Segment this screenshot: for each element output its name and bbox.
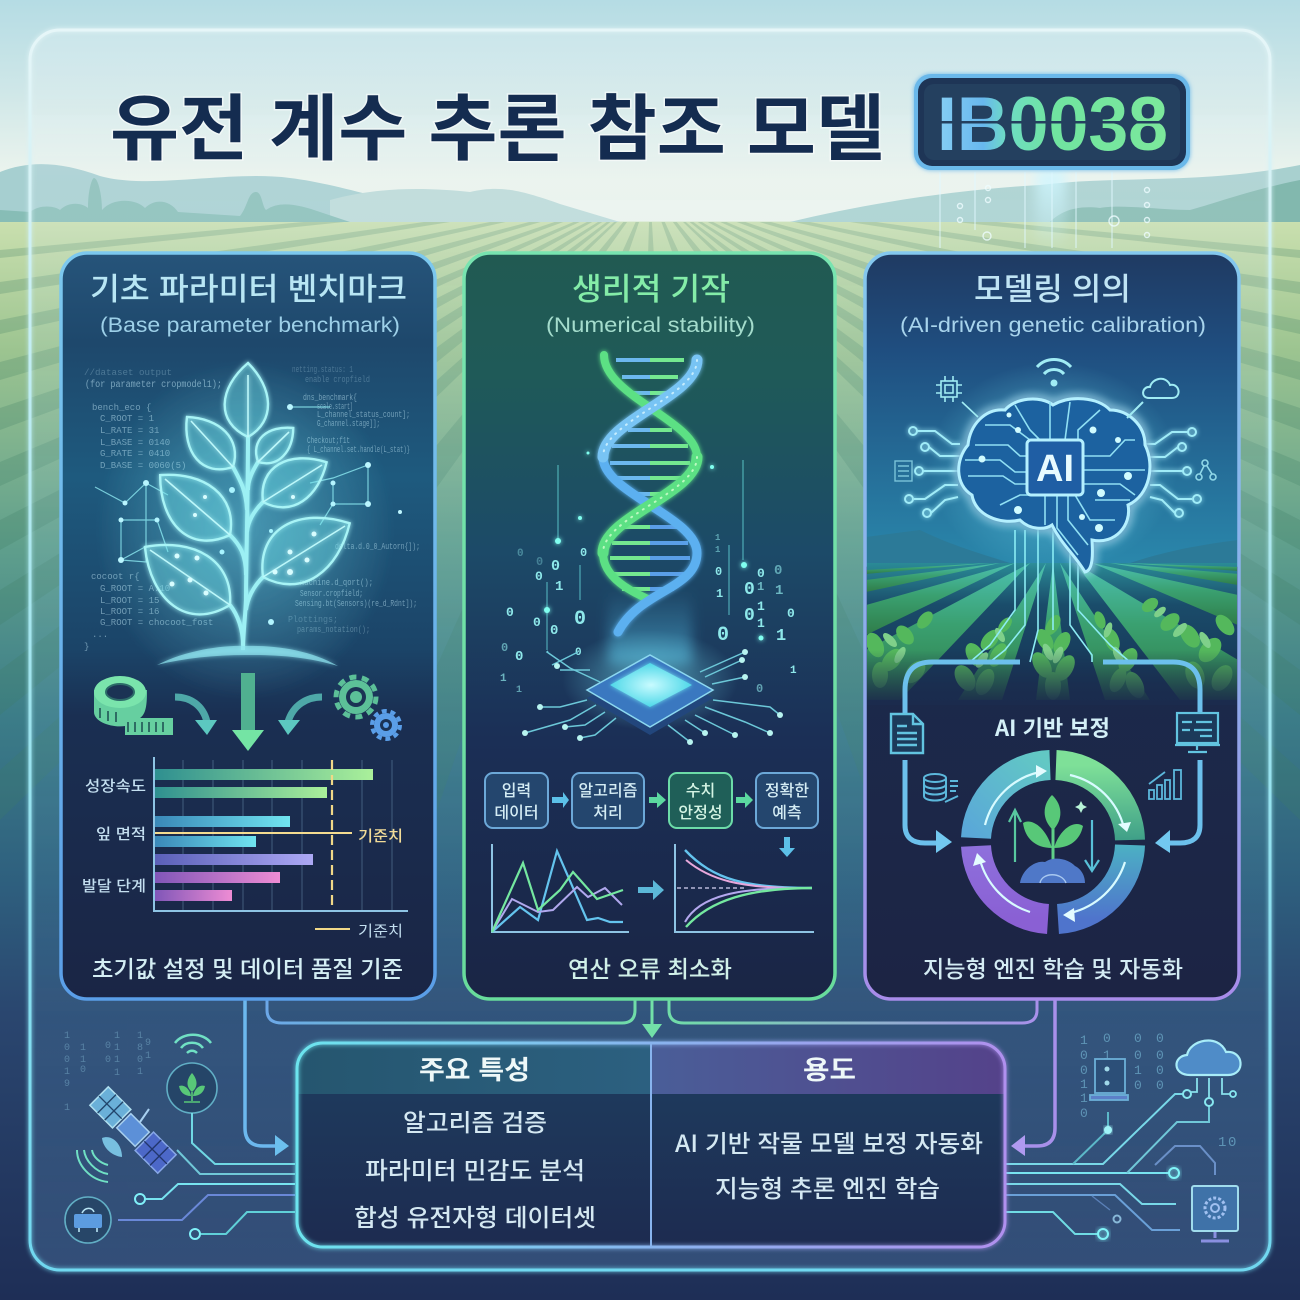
binary digits: bottom left: 0 (105, 1055, 111, 1066)
binary digits: 1 (757, 599, 765, 614)
flow: input to prediction: 예측 (772, 799, 802, 823)
bar chart: 기준치 (358, 825, 403, 846)
binary digits: 1 (715, 545, 721, 555)
code snippets behind plant: Sensor.cropfield; (300, 589, 363, 599)
column heading: uses: 용도 (803, 1050, 856, 1087)
binary digits: 0 (575, 647, 582, 659)
list: key characteristics: 알고리즘 검증 (403, 1103, 547, 1138)
caption: benchmark: 초기값 설정 및 데이터 품질 기준 (92, 950, 403, 984)
column heading: key characteristics: 주요 특성 (419, 1050, 530, 1087)
flow: input to prediction: 처리 (593, 799, 623, 823)
binary digits: 1 (715, 533, 721, 543)
code snippets behind plant: L_channel_status_count]; (317, 410, 410, 420)
illustration: DNA helix (500, 355, 797, 745)
icon: gear monitor (1192, 1186, 1238, 1241)
icon: gears (336, 677, 400, 739)
binary digits: bottom right: 1 (1080, 1033, 1088, 1048)
binary digits: 0 (574, 608, 586, 631)
binary digits: bottom right: 0 (1156, 1048, 1164, 1063)
binary digits: bottom left: 1 (114, 1043, 120, 1054)
code snippets behind plant: //dataset output (84, 368, 172, 378)
binary digits: bottom right: 0 (1103, 1031, 1111, 1046)
loop: lower left arrow (905, 760, 952, 853)
bar chart: 발달 단계 (82, 875, 146, 896)
binary digits: bottom right: 0 (1134, 1048, 1142, 1063)
icon: sprout (1009, 795, 1099, 883)
code snippets behind plant: G_RATE = 0410 (100, 449, 170, 459)
flow: input to prediction: 수치 (686, 777, 715, 801)
arrow: centre panel to table (642, 1000, 662, 1038)
flow: input to prediction: 입력 (502, 777, 531, 801)
panel: base parameter benchmark (61, 253, 435, 999)
binary digits: 1 (790, 665, 797, 677)
illustration: AI brain (905, 362, 1201, 572)
flow: input to prediction: 데이터 (494, 799, 539, 823)
binary digits: bottom right: 0 (1156, 1031, 1164, 1046)
binary digits: 0 (536, 555, 543, 569)
binary digits: bottom left: 0 (105, 1041, 111, 1052)
circuit lines: bottom left (118, 1113, 295, 1239)
code snippets behind plant: { L_channel.set.handle(L_stat)} (307, 445, 410, 455)
label: AI calibration: AI 기반 보정 (994, 711, 1110, 743)
binary digits: 1 (757, 616, 765, 631)
code snippets behind plant: ... (92, 630, 108, 640)
binary digits: bottom left: 0 (64, 1043, 70, 1054)
heading: benchmark: 기초 파라미터 벤치마크 (90, 264, 407, 309)
chart: unstable lines (492, 844, 629, 932)
binary digits: bottom left: 8 (137, 1043, 143, 1054)
arrow: centre down to chart (232, 673, 264, 751)
icon: wifi above plant bubble (175, 1035, 211, 1053)
binary digits: bottom right: 1 (1103, 1048, 1111, 1063)
binary digits: 0 (515, 649, 523, 665)
binary digits: 0 (551, 558, 560, 575)
binary digits: bottom left (64, 1031, 151, 1114)
binary digits: bottom left: 0 (137, 1055, 143, 1066)
binary digits: bottom right: 1 (1080, 1077, 1088, 1092)
code snippets behind plant: bench_eco { (92, 403, 151, 413)
binary digits: 1 (775, 583, 783, 599)
binary digits: 0 (757, 566, 765, 581)
flow: input to prediction: 정확한 (765, 777, 809, 801)
icon: laptop (1090, 1059, 1128, 1100)
bar chart: 성장속도 (85, 775, 146, 796)
code snippets behind plant: (for parameter cropmodel1); (85, 379, 222, 391)
illustration: AI field (862, 530, 1238, 705)
binary digits: 1 (555, 579, 563, 595)
code snippets behind plant: L_ROOT = 15 (100, 596, 159, 606)
code snippets behind plant: delta.d.0_0_Autorn{]); (335, 542, 420, 552)
binary digits: bottom left: 0 (64, 1055, 70, 1066)
binary digits: bottom left: 9 (64, 1079, 70, 1090)
binary digits: bottom left: 1 (114, 1068, 120, 1079)
binary digits: bottom left: 1 (80, 1043, 86, 1054)
binary digits: bottom left: 1 (145, 1051, 151, 1062)
binary digits: 0 (501, 641, 508, 655)
binary digits: 0 (517, 548, 524, 560)
cycle diagram (973, 765, 1131, 922)
flow: input to prediction (485, 773, 818, 857)
list: key characteristics: 합성 유전자형 데이터셋 (354, 1198, 596, 1233)
subheading: stability: (Numerical stability) (546, 314, 755, 337)
caption: significance: 지능형 엔진 학습 및 자동화 (923, 950, 1183, 984)
code snippets behind plant: machine.d_qort(); (300, 578, 373, 588)
circuit nodes around brain (905, 427, 1201, 517)
code snippets behind plant: Checkout;f1t (307, 436, 350, 446)
code snippets behind plant: netting.status: 1 (292, 365, 353, 375)
arrow: tape to chart (175, 697, 217, 735)
icon: small chip (936, 376, 978, 417)
binary digits: 0 (580, 546, 587, 560)
icon: plant bubble (167, 1063, 217, 1113)
bar chart: 잎 면적 (96, 823, 146, 844)
icon: satellite (77, 1087, 176, 1182)
flow: input to prediction: 알고리즘 (579, 777, 637, 801)
binary digits: bottom right: 0 (1156, 1063, 1164, 1078)
code snippets behind plant: } (84, 642, 89, 652)
binary digits: 1 (776, 627, 786, 646)
binary digits: bottom right: 0 (1080, 1048, 1088, 1063)
circuit lines: bottom right (1005, 1090, 1215, 1239)
code snippets behind plant: Plottings; (288, 615, 338, 625)
code snippets behind plant: dns_benchmark{ (303, 393, 357, 403)
binary digits: bottom right: 1 (1080, 1091, 1088, 1106)
connector trays under panels (267, 1000, 1037, 1023)
binary digits: 0 (756, 682, 763, 696)
code snippets behind plant: Sensing.bt(Sensors)(re_d_Rdnt]); (295, 599, 417, 609)
binary digits (500, 533, 797, 696)
code snippets behind plant: cocoot r{ (91, 572, 140, 582)
icon: document (895, 461, 912, 481)
caption: stability: 연산 오류 최소화 (568, 950, 732, 984)
binary digits: bottom left: 1 (64, 1067, 70, 1078)
icon: code monitor (1175, 713, 1220, 752)
binary digits: 0 (787, 606, 795, 621)
binary digits: 0 (774, 563, 782, 579)
binary digits: 0 (717, 624, 729, 647)
code snippets behind plant: enable cropfield (305, 375, 370, 385)
binary digits: 0 (715, 565, 722, 579)
icon: cloud (1127, 379, 1179, 418)
chip label: AI: AI (1036, 448, 1074, 490)
binary digits: 1 (757, 580, 764, 594)
icon: document file (891, 714, 923, 753)
graph nodes behind plant (95, 404, 402, 625)
binary digits: 1 (716, 587, 723, 601)
code snippets behind plant: G_ROOT = A.10 (100, 584, 170, 594)
heading: significance: 모델링 의의 (974, 264, 1131, 309)
binary digits: bottom left: 1 (64, 1031, 70, 1042)
code snippets behind plant: D_BASE = 0060(5) (100, 461, 186, 471)
icon: molecules (1196, 460, 1216, 480)
list: key characteristics: 파라미터 민감도 분석 (365, 1151, 585, 1186)
chart: converging lines (675, 844, 814, 932)
code snippets behind plant (84, 365, 420, 652)
binary digits: bottom right: 0 (1134, 1031, 1142, 1046)
code snippets behind plant: L_ROOT = 16 (100, 607, 159, 617)
code snippets behind plant: params_notation(); (297, 625, 370, 635)
flow: input to prediction: 안정성 (678, 799, 723, 823)
binary digits: 0 (744, 606, 755, 626)
table: characteristics and uses (297, 1043, 1005, 1247)
list: uses (675, 1124, 983, 1204)
binary digits: bottom right: 0 (1228, 1135, 1236, 1151)
subheading: significance: (AI-driven genetic calibration) (900, 314, 1206, 337)
binary digits: bottom left: 1 (64, 1103, 70, 1114)
binary digits: bottom left: 9 (145, 1038, 151, 1049)
arrow: gears to chart (278, 697, 322, 735)
binary digits: bottom right: 0 (1080, 1063, 1088, 1078)
arrow: between charts (638, 880, 664, 900)
icon: cloud with links (1176, 1040, 1241, 1098)
binary digits: bottom left: 1 (114, 1031, 120, 1042)
binary digits: bottom right: 0 (1156, 1078, 1164, 1093)
icon: sensor bubble (65, 1197, 111, 1243)
binary digits: bottom left: 1 (137, 1031, 143, 1042)
binary digits: bottom left: 0 (80, 1065, 86, 1076)
icon: growth bars (1149, 770, 1181, 799)
code snippets behind plant: scale.start] (317, 402, 353, 412)
list: uses: 지능형 추론 엔진 학습 (715, 1169, 940, 1204)
binary digits: 0 (535, 569, 543, 584)
code snippets behind plant: G_ROOT = chocoot_fost (100, 618, 213, 628)
panel: modelling significance (862, 253, 1239, 999)
code snippets behind plant: G_channel.stage]]; (317, 419, 380, 429)
code snippets behind plant: L_BASE = 0140 (100, 438, 170, 448)
binary digits: bottom right: 1 (1218, 1135, 1226, 1151)
bar chart: 기준치 (358, 920, 403, 941)
icon: database (924, 774, 958, 802)
binary digits: 1 (516, 685, 522, 696)
binary digits: 0 (744, 580, 755, 600)
arrow: right panel to table (1011, 1000, 1055, 1156)
title: 유전 계수 추론 참조 모델 (110, 70, 885, 175)
data stream under badge (940, 170, 1150, 252)
bar chart (82, 757, 408, 941)
code snippets behind plant: L_RATE = 31 (100, 426, 159, 436)
binary digits: bottom left: 1 (114, 1055, 120, 1066)
arrow: left panel to table (245, 1000, 289, 1156)
illustration: digital plant (95, 360, 395, 700)
list: key characteristics (354, 1103, 596, 1233)
illustration: chip with traces (522, 630, 783, 745)
binary digits: 0 (506, 605, 514, 620)
digital stream lines and dots (547, 460, 743, 650)
badge: IB0038: IB0038 (937, 82, 1168, 167)
loop: lower right arrow (1155, 760, 1200, 853)
code snippets behind plant: C_ROOT = 1 (100, 414, 154, 424)
binary digits: bottom right: 0 (1080, 1106, 1088, 1121)
loop: top connectors (905, 662, 1200, 713)
binary digits: 1 (500, 673, 507, 685)
binary digits: 0 (550, 623, 558, 639)
binary digits: bottom right: 1 (1134, 1063, 1142, 1078)
subheading: benchmark: (Base parameter benchmark) (100, 314, 400, 337)
panel: numerical stability (464, 253, 835, 999)
icon: wifi (1037, 360, 1071, 385)
binary digits: 0 (533, 615, 541, 630)
icon: tape measure (94, 676, 173, 735)
binary digits: bottom left: 1 (137, 1067, 143, 1078)
binary digits: bottom right: 0 (1134, 1078, 1142, 1093)
heading: stability: 생리적 기작 (572, 264, 730, 309)
binary digits: bottom right (1080, 1031, 1236, 1151)
binary digits: bottom left: 1 (80, 1055, 86, 1066)
list: uses: AI 기반 작물 모델 보정 자동화 (675, 1124, 983, 1159)
